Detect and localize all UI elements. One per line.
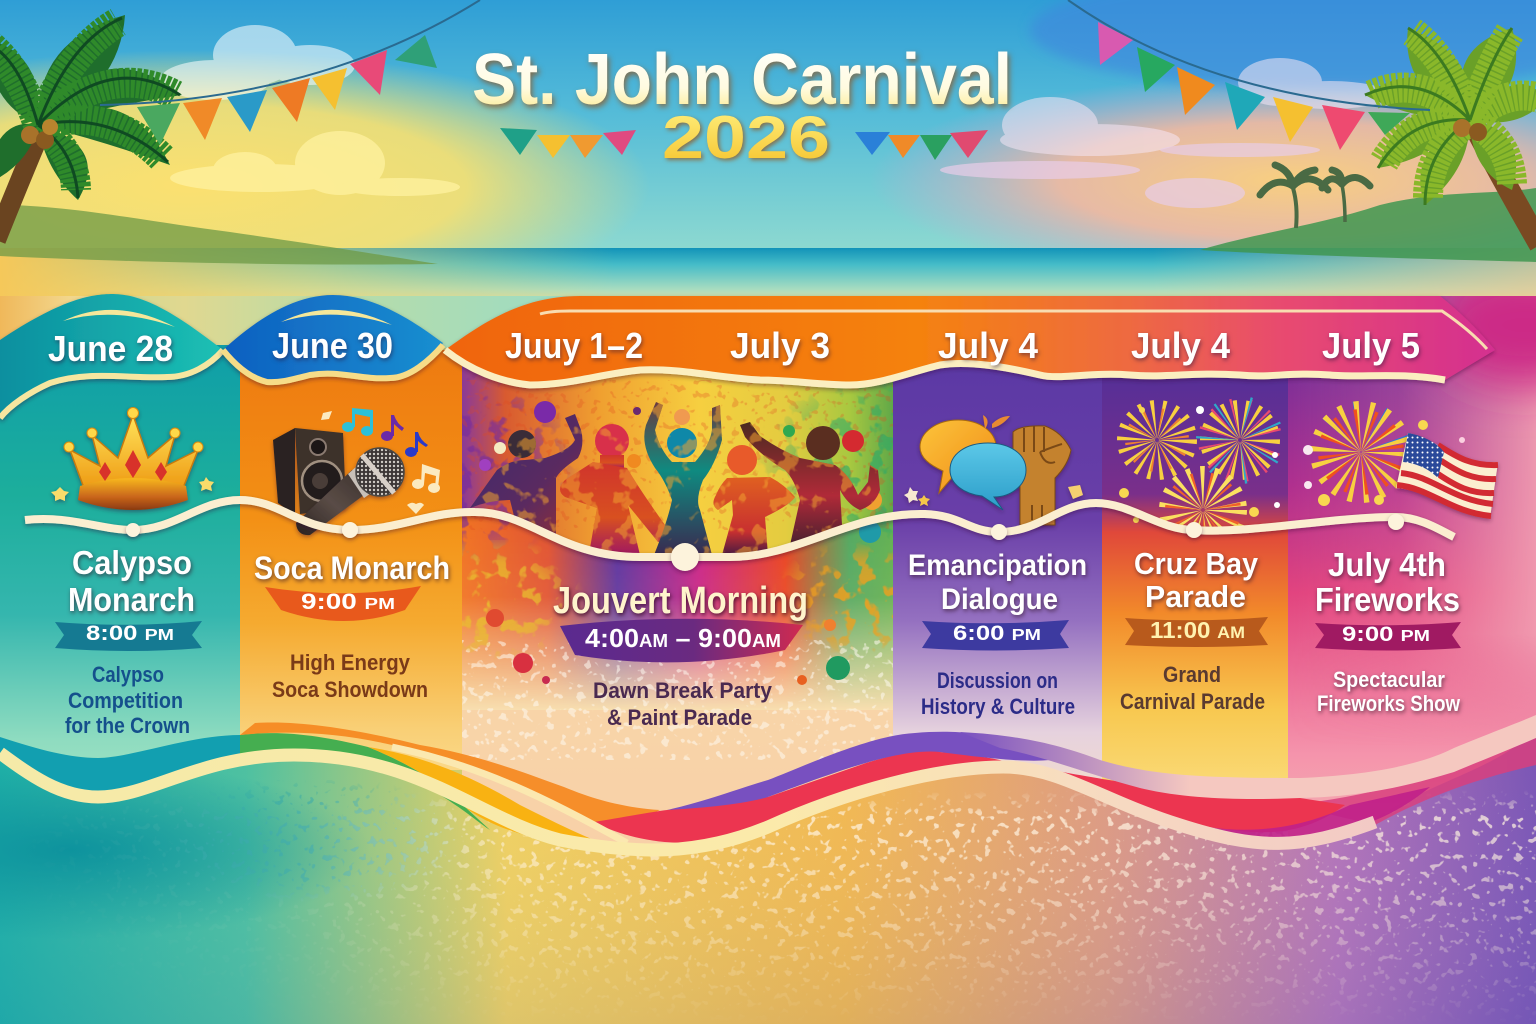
time banner [922,620,1069,650]
heading: Parade [1145,579,1246,614]
description: Carnival Parade [1120,689,1265,714]
time banner [560,619,803,662]
timeline panels [0,263,1536,860]
year 2026: 2026 [662,104,830,171]
icon: speech bubbles and fist [904,415,1083,525]
heading [908,549,1087,616]
heading [68,544,195,618]
time: 9:00 PM [301,589,395,614]
heading [1315,546,1460,618]
stars [1119,406,1465,523]
description: Competition [68,688,183,713]
pink right ribbon [1290,732,1536,825]
rainbow ribbon [240,733,490,830]
burst left [1136,419,1178,461]
left palm tree [0,15,182,240]
heading: July 4th [1328,546,1446,583]
date: July 4: July 4 [938,325,1038,366]
panel: June 30 background [240,350,462,770]
dancer 2 [560,424,671,555]
date: Juuy 1-2: Juuy 1–2 [505,325,643,366]
title: St. John Carnival [472,40,1012,120]
heading: Emancipation [908,549,1087,582]
time banner [265,586,421,621]
heading: Soca Monarch [254,550,450,586]
time: 8:00 PM [86,622,174,645]
cream band top orange [392,747,627,843]
right palm tree [1365,28,1536,245]
heading: Calypso [72,544,192,581]
icon: dancing crowd [470,402,880,553]
time: 6:00 PM [953,622,1041,645]
description [593,678,773,730]
purple note [381,415,404,441]
description: High Energy [290,650,411,675]
event: July 4th Fireworks [1315,546,1461,716]
pink cream band right [960,715,1536,799]
icon: music notes [321,408,440,514]
event: Soca Monarch [254,550,450,702]
icon: fireworks group [1119,406,1465,533]
sea [0,248,1536,303]
sky background [0,0,1536,320]
time: 9:00 PM [1342,623,1430,646]
title mini bunting left [500,128,636,158]
purple ribbon [667,732,1050,810]
left island [0,205,438,265]
header ribbon: June 30 [223,295,443,382]
panel: Jouvert background [462,350,893,860]
icon: microphone [296,448,404,535]
paint splatter texture [462,376,893,760]
upper cream bands and colour ribbons [0,715,1536,851]
lower cream wave line [0,753,1375,850]
dancer 5 [740,422,880,545]
time: 11:00 AM [1150,617,1245,643]
description [272,650,428,702]
left bunting [100,0,480,145]
orange ribbon [240,722,660,822]
icon: American flag [1396,433,1498,518]
paint on dancers [481,403,878,553]
heading [1134,546,1259,614]
description: Dawn Break Party [593,678,773,703]
description: History & Culture [921,694,1075,719]
middle timeline wave [25,500,1454,557]
event: Calypso Monarch [55,544,202,738]
panel: Fireworks background [1288,296,1536,810]
description: Soca Showdown [272,677,428,702]
magenta ribbon tail [1209,787,1430,840]
right island [1200,188,1536,262]
cream note [412,464,440,493]
time banner [1315,622,1461,650]
icon: speaker [273,428,346,515]
date: June 30: June 30 [272,325,393,366]
time banner [55,621,202,651]
icon: crown [51,408,214,510]
teal ribbon [0,735,240,797]
heading: Monarch [68,581,195,618]
event: Emancipation Dialogue [908,549,1087,719]
right bunting [1068,0,1430,150]
description [1120,662,1265,714]
heading: Dialogue [941,583,1058,616]
event: Cruz Bay Parade [1120,546,1268,714]
description: & Paint Parade [607,705,752,730]
date: July 5: July 5 [1322,325,1420,366]
description: for the Crown [65,713,190,738]
burst flag side [1335,426,1387,478]
event: Jouvert Morning [553,580,808,730]
description: Calypso [92,662,164,687]
time: 4:00AM – 9:00AM [585,623,781,653]
header ribbon: orange arrow [445,296,1495,385]
description [1317,667,1461,716]
yellow ribbon [368,747,627,851]
timeline dots [126,514,1404,571]
burst bottom [1180,487,1226,533]
heading: Jouvert Morning [553,580,808,622]
header ribbon: June 28 [0,294,223,418]
distant palm trees [1260,165,1370,228]
description: Spectacular [1333,667,1445,692]
description [921,668,1075,719]
dancer 1 [470,414,582,540]
panel: Cruz Bay background [1102,350,1288,830]
date: July 3: July 3 [730,325,830,366]
date labels [48,325,1420,369]
heading: Fireworks [1315,581,1460,618]
dancer 4 [713,445,795,555]
burst right [1216,416,1264,464]
time banner [1125,617,1268,647]
description [65,662,190,738]
red ribbon [593,750,1345,843]
description: Discussion on [937,668,1058,693]
description: Fireworks Show [1317,691,1461,716]
blue note [405,432,428,457]
title mini bunting right [855,130,988,160]
panel: June 28 background [0,345,240,758]
clouds [160,25,1390,208]
date: June 28: June 28 [48,328,173,369]
sand background [0,296,1536,1024]
date: July 4 parade: July 4 [1131,325,1230,366]
heading: Cruz Bay [1134,546,1259,581]
dancer 3 [644,402,722,555]
description: Grand [1163,662,1221,687]
cyan note [342,408,373,436]
panel: Emancipation background [893,350,1102,800]
